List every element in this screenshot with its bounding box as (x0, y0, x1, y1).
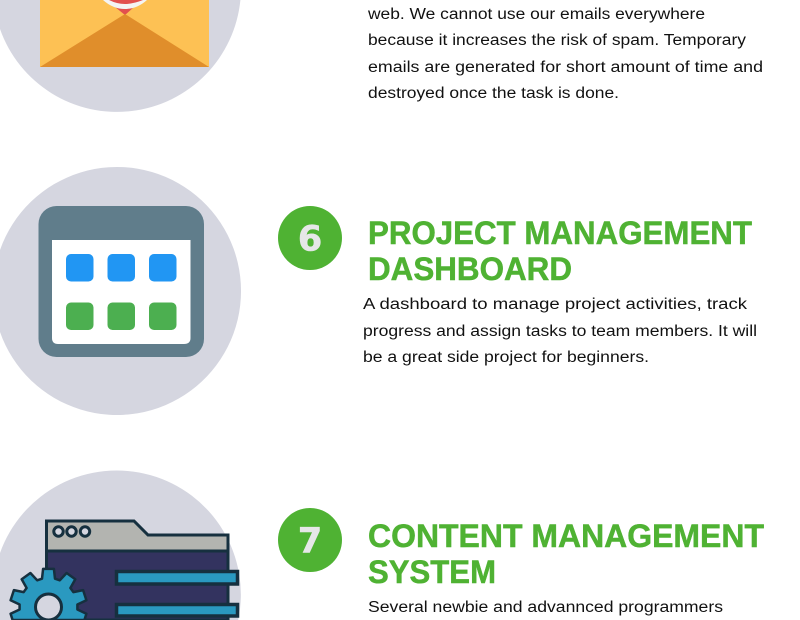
text: temporary email description: web. We cannot use our emails everywhere (367, 6, 705, 23)
panel: project management dashboard item (0, 167, 757, 415)
icon: browser window with gear in circle (0, 470, 241, 620)
panel: content management system item (0, 470, 764, 620)
heading: content management system (368, 518, 764, 590)
text: dashboard description: progress and assign tasks to team members. It will (363, 323, 757, 340)
text: temporary email description (367, 6, 763, 102)
heading: project management dashboard: DASHBOARD (368, 251, 572, 287)
text: dashboard description: A dashboard to manage project activities, track (363, 296, 747, 313)
number badge 7: 7 (298, 522, 322, 562)
icon: envelope in circle (0, 0, 240, 112)
heading: project management dashboard (368, 215, 752, 287)
text: dashboard description: be a great side project for beginners. (363, 349, 649, 366)
heading: content management system: SYSTEM (368, 554, 496, 590)
icon: dashboard window in circle (0, 167, 241, 415)
text: dashboard description (363, 296, 757, 366)
heading: content management system: CONTENT MANAGEMENT (368, 518, 764, 554)
number badge 6: 6 (298, 220, 322, 260)
text: cms description: Several newbie and advannced programmers (368, 599, 723, 616)
text: temporary email description: destroyed once the task is done. (368, 85, 619, 102)
heading: project management dashboard: PROJECT MANAGEMENT (368, 215, 752, 251)
text: temporary email description: because it increases the risk of spam. Temporary (368, 32, 746, 49)
number badge 7 (278, 508, 342, 572)
panel: temporary email item (0, 0, 763, 112)
number badge 6 (278, 206, 342, 270)
text: temporary email description: emails are generated for short amount of time and (368, 59, 763, 76)
